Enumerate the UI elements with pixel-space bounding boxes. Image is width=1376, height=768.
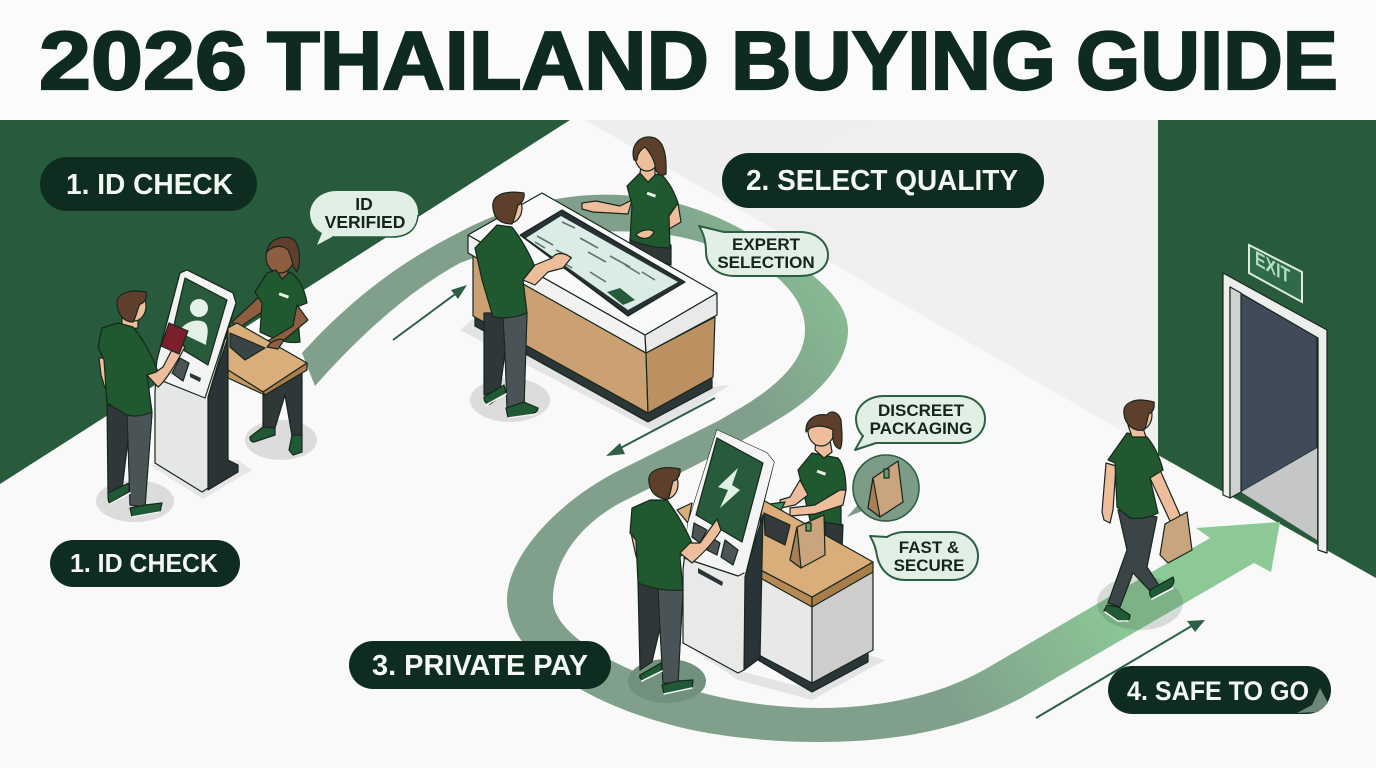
speech bubble: discreet packaging: PACKAGING — [870, 419, 972, 438]
scene 2: expert selection — [460, 137, 1044, 456]
step 2 pill — [722, 153, 1044, 208]
step 1 pill on wall: 1. ID CHECK — [66, 169, 233, 201]
exit doorway — [1223, 273, 1327, 553]
scene 4: exit — [1036, 245, 1331, 718]
customer journey path — [302, 195, 1280, 742]
payment counter — [677, 500, 873, 692]
speech bubble: fast and secure — [870, 532, 978, 580]
exit sign: EXIT — [1255, 247, 1291, 289]
selection counter — [468, 193, 717, 422]
title — [39, 14, 1338, 107]
paper bag on counter — [790, 515, 825, 568]
speech bubble: id verified: ID — [355, 194, 373, 214]
scene 3: private pay — [349, 396, 985, 703]
small arrow: to exit — [1036, 620, 1205, 718]
payment staff — [768, 412, 846, 550]
staff member one — [232, 237, 308, 455]
step 4 pill — [1108, 666, 1331, 714]
small arrow: to selection — [393, 285, 467, 340]
step 1 pill on floor — [50, 540, 240, 587]
floor shadows — [96, 420, 317, 522]
customer two — [470, 192, 571, 422]
speech bubble: expert selection — [699, 226, 828, 276]
step 3 pill — [349, 641, 611, 689]
exit sign — [1249, 245, 1302, 302]
speech bubble: discreet packaging — [855, 396, 985, 450]
walking customer — [1097, 400, 1192, 630]
step 1 pill on floor: 1. ID CHECK — [70, 548, 218, 578]
customer three — [630, 468, 721, 694]
scene 1: id check — [96, 237, 317, 522]
speech bubble: id verified — [310, 191, 418, 245]
back wall — [585, 120, 1158, 452]
speech bubble: expert selection: SELECTION — [717, 253, 815, 272]
green arrow head — [1196, 522, 1280, 572]
bag callout circle — [847, 455, 919, 521]
step 2 pill: 2. SELECT QUALITY — [746, 165, 1018, 197]
title: THAILAND — [267, 14, 709, 107]
step 4 pill: 4. SAFE TO GO — [1127, 676, 1309, 706]
speech bubble: expert selection: EXPERT — [732, 235, 801, 254]
kiosk two — [683, 430, 774, 673]
title: BUYING — [731, 14, 1056, 107]
customer one — [98, 291, 188, 517]
speech bubble: id verified: VERIFIED — [325, 212, 405, 232]
step 1 pill on wall — [40, 157, 257, 211]
kiosk one — [155, 270, 238, 492]
small arrow: to payment — [606, 398, 715, 456]
selection staff — [582, 137, 681, 265]
id desk with card reader — [228, 323, 307, 395]
product touch screen — [520, 210, 685, 316]
speech bubble: fast and secure: SECURE — [894, 556, 964, 575]
floor shadows — [628, 643, 885, 703]
lightning icon — [718, 468, 740, 508]
left green wall — [0, 120, 570, 484]
speech bubble: discreet packaging: DISCREET — [878, 401, 965, 420]
title: 2026 — [39, 14, 247, 107]
step 3 pill: 3. PRIVATE PAY — [372, 650, 588, 682]
speech bubble: fast and secure: FAST & — [899, 538, 959, 557]
counter shadow — [460, 317, 730, 432]
right green wall — [1158, 120, 1376, 578]
title: GUIDE — [1076, 14, 1338, 107]
